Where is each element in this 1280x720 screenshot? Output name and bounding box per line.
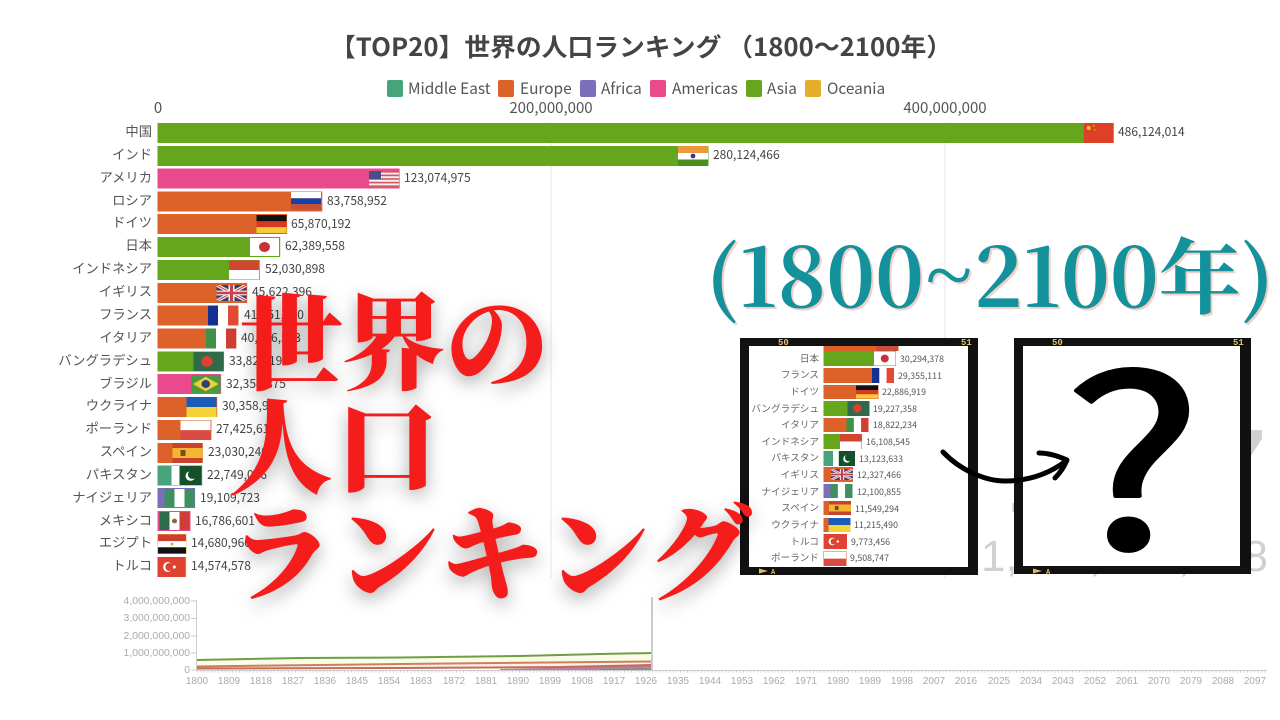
timeline line chart: 2007 (923, 676, 946, 687)
red headline: 世界の人口ランキング: 世界の (239, 261, 549, 411)
faint year counter behind frames: , (1178, 532, 1190, 581)
bar: ナイジェリア: 19,109,723 (200, 489, 260, 506)
legend: Europe (520, 77, 572, 99)
bar: インド (112, 144, 780, 166)
bar: イギリス (99, 281, 312, 303)
timeline line chart: 1935 (667, 676, 690, 687)
bar: バングラデシュ: 33,820,190 (229, 352, 289, 369)
timeline line chart: 1944 (699, 676, 722, 687)
small bar: トルコ: 9,773,456 (851, 535, 890, 548)
bar: ロシア: 83,758,952 (327, 192, 387, 209)
value axis: 400,000,000 (903, 97, 987, 118)
bar: パキスタン: 22,749,006 (207, 466, 267, 483)
small bar: 日本: 日本 (800, 351, 819, 365)
bar: 中国: 486,124,014 (1118, 123, 1185, 140)
timeline line chart: 2016 (955, 676, 978, 687)
timeline line chart: 1962 (763, 676, 786, 687)
teal heading: year range: (1800~2100年) (706, 214, 1274, 331)
small bar: バングラデシュ: 19,227,358 (873, 402, 917, 415)
panel: film frame with earlier ranking: A (771, 569, 776, 577)
timeline line chart: 1818 (250, 676, 273, 687)
panel: film frame with question mark (1014, 276, 1251, 616)
legend: Asia (767, 77, 797, 99)
bar: フランス: 41,151,400 (244, 306, 304, 323)
timeline line chart (124, 596, 1267, 687)
bar: イギリス: 45,622,396 (252, 283, 312, 300)
small bar: イギリス: 12,327,466 (857, 468, 901, 481)
small bar: パキスタン: パキスタン (771, 450, 819, 464)
small bar: フランス: 29,355,111 (898, 369, 942, 382)
bar: ウクライナ: ウクライナ (86, 395, 152, 414)
bar: メキシコ: メキシコ (99, 510, 152, 529)
bar: ロシア (112, 190, 387, 212)
bar: パキスタン: パキスタン (86, 464, 152, 483)
timeline line chart: 2097 (1244, 676, 1267, 687)
panel: film frame with question mark: 50 (1052, 338, 1063, 348)
small bar: ウクライナ (771, 517, 898, 532)
timeline line chart: 1926 (635, 676, 658, 687)
small bar: トルコ: トルコ (790, 534, 819, 548)
arrow: curved arrow to question mark (943, 452, 1067, 481)
small bar: ウクライナ: ウクライナ (771, 517, 819, 531)
panel: film frame with earlier ranking: 50 (778, 338, 789, 348)
bar: ポーランド: 27,425,610 (216, 420, 276, 437)
bar: アメリカ: 123,074,975 (404, 169, 471, 186)
icon: question mark: ? (1064, 276, 1202, 616)
small bar: ナイジェリア: 12,100,855 (857, 485, 901, 498)
timeline line chart: 1,000,000,000 (124, 648, 190, 659)
bar: ポーランド (86, 418, 276, 440)
small bar: インドネシア (761, 434, 910, 449)
panel: film frame with question mark: A (1046, 569, 1051, 577)
bar: バングラデシュ (58, 350, 289, 372)
small bar: イギリス: イギリス (781, 467, 819, 481)
bar: ブラジル (99, 373, 286, 394)
bar: トルコ: トルコ (112, 555, 152, 574)
bar: イタリア: イタリア (99, 327, 152, 346)
small bar: パキスタン: 13,123,633 (859, 452, 903, 465)
bar: ポーランド: ポーランド (86, 418, 152, 437)
panel: film frame with earlier ranking (740, 338, 978, 577)
bar: ナイジェリア (72, 487, 260, 508)
bar: ドイツ: ドイツ (112, 212, 152, 231)
timeline line chart: 2052 (1084, 676, 1107, 687)
panel: film frame with earlier ranking: 51 (961, 338, 972, 348)
timeline line chart: 1881 (475, 676, 498, 687)
legend: Americas (672, 77, 738, 99)
bar: ブラジル: ブラジル (99, 373, 152, 392)
bar: イタリア: 40,116,513 (241, 329, 301, 346)
small bar: イタリア: 18,822,234 (873, 418, 917, 431)
legend: Middle East (408, 77, 491, 99)
timeline line chart: 2,000,000,000 (124, 631, 190, 642)
timeline line chart: 1827 (282, 676, 305, 687)
bar: インド: 280,124,466 (713, 146, 780, 163)
bar: パキスタン (86, 464, 267, 486)
bar: インドネシア: 52,030,898 (265, 260, 325, 277)
timeline line chart: 1989 (859, 676, 882, 687)
timeline line chart: 1980 (827, 676, 850, 687)
bar chart: top 20 population ranking (58, 121, 1185, 577)
small bar: スペイン (781, 500, 899, 515)
timeline line chart: 1836 (314, 676, 337, 687)
timeline line chart: 4,000,000,000 (124, 596, 190, 607)
bar: ウクライナ: 30,358,960 (222, 397, 282, 414)
small bar: イタリア (781, 417, 917, 432)
small bar: スペイン: 11,549,294 (855, 502, 899, 515)
bar: 日本 (125, 235, 345, 257)
timeline line chart: 0 (184, 665, 190, 676)
small bar: ナイジェリア (761, 484, 901, 498)
red headline: 世界の人口ランキング: 人口 (229, 366, 439, 516)
bar: スペイン: スペイン (100, 441, 152, 460)
small bar: フランス (781, 367, 942, 383)
timeline line chart: 1953 (731, 676, 754, 687)
red headline: 世界の人口ランキング: ランキング (229, 472, 752, 622)
bar: 日本: 日本 (125, 235, 152, 254)
legend: Africa (601, 77, 642, 99)
timeline line chart: 3,000,000,000 (124, 613, 190, 624)
faint year counter behind frames (981, 405, 1268, 581)
red headline: 世界の人口ランキング (229, 261, 752, 622)
bar: スペイン: 23,030,240 (208, 443, 268, 460)
panel: film frame with question mark: 51 (1233, 338, 1244, 348)
small bar: フランス: フランス (781, 367, 819, 381)
bar: メキシコ (99, 510, 255, 531)
value axis: 0 (154, 97, 162, 118)
small bar: インドネシア: インドネシア (761, 434, 819, 448)
timeline line chart: 1908 (571, 676, 594, 687)
value axis: 200,000,000 (509, 97, 593, 118)
timeline line chart: 2088 (1212, 676, 1235, 687)
bar: イギリス: イギリス (99, 281, 152, 300)
bar: エジプト: 14,680,960 (191, 534, 251, 551)
timeline line chart: 1872 (443, 676, 466, 687)
bar: アメリカ (99, 167, 471, 188)
timeline line chart: 2079 (1180, 676, 1203, 687)
timeline line chart: 1971 (795, 676, 818, 687)
timeline line chart: 2061 (1116, 676, 1139, 687)
timeline line chart: 1899 (539, 676, 562, 687)
small bar: ドイツ (790, 384, 926, 399)
small bar: ポーランド (771, 550, 889, 566)
bar: フランス (99, 304, 304, 326)
chart title: 【TOP20】世界の人口ランキング （1800～2100年） (330, 28, 952, 64)
small bar: 日本 (800, 351, 944, 366)
bar: メキシコ: 16,786,601 (195, 512, 255, 529)
small bar: ウクライナ: 11,215,490 (854, 518, 898, 531)
bar: 日本: 62,389,558 (285, 237, 345, 254)
small bar: ポーランド: 9,508,747 (850, 551, 889, 564)
timeline line chart: 1998 (891, 676, 914, 687)
small bar: ドイツ: 22,886,919 (882, 385, 926, 398)
small bar: 日本: 30,294,378 (900, 352, 944, 365)
bar: ドイツ: 65,870,192 (291, 215, 351, 232)
timeline line chart: 2025 (988, 676, 1011, 687)
bar: アメリカ: アメリカ (99, 167, 152, 186)
timeline line chart: 1845 (346, 676, 369, 687)
timeline line chart: 1917 (603, 676, 626, 687)
bar: トルコ: 14,574,578 (191, 557, 251, 574)
bar: フランス: フランス (99, 304, 152, 323)
timeline line chart: 2034 (1020, 676, 1043, 687)
small bar: スペイン: スペイン (781, 500, 819, 514)
timeline line chart: 1890 (507, 676, 530, 687)
small bar: バングラデシュ (751, 401, 917, 416)
bar: ドイツ (112, 212, 351, 234)
bar: エジプト: エジプト (99, 532, 152, 551)
small bar: パキスタン (771, 450, 903, 466)
faint year counter behind frames: 1927 (1003, 405, 1268, 538)
bar: ナイジェリア: ナイジェリア (72, 487, 152, 506)
legend (387, 77, 885, 99)
small bar: インドネシア: 16,108,545 (866, 435, 910, 448)
small bar: イギリス (781, 467, 901, 482)
timeline line chart: 2070 (1148, 676, 1171, 687)
timeline line chart: 1809 (218, 676, 241, 687)
small bar: ナイジェリア: ナイジェリア (761, 484, 819, 498)
value axis (154, 97, 987, 578)
bar: ロシア: ロシア (112, 190, 152, 209)
bar: インドネシア: インドネシア (72, 258, 152, 277)
bar: ブラジル: 32,354,875 (226, 375, 286, 392)
faint year counter behind frames: 8 (1244, 532, 1268, 581)
timeline line chart: 1863 (410, 676, 433, 687)
small bar: トルコ (790, 534, 890, 549)
faint year counter behind frames: 1, (981, 532, 1018, 581)
bar: バングラデシュ: バングラデシュ (58, 350, 152, 369)
bar: トルコ (112, 555, 251, 577)
bar: イタリア (99, 327, 301, 348)
bar: 中国 (125, 121, 1185, 143)
timeline line chart: 2043 (1052, 676, 1075, 687)
bar: インド: インド (112, 144, 152, 163)
bar: スペイン (100, 441, 268, 463)
small bar: ポーランド: ポーランド (771, 550, 819, 564)
bar: インドネシア (72, 258, 325, 280)
timeline line chart: 1800 (186, 676, 209, 687)
small bar: ドイツ: ドイツ (790, 384, 819, 398)
timeline line chart: 1854 (378, 676, 401, 687)
bar: ウクライナ (86, 395, 282, 417)
small bar: イタリア: イタリア (781, 417, 819, 431)
bar: エジプト (99, 532, 251, 554)
faint year counter behind frames: , (1089, 532, 1101, 581)
bar: 中国: 中国 (125, 121, 152, 140)
legend: Oceania (827, 77, 885, 99)
small bar: バングラデシュ: バングラデシュ (751, 401, 819, 415)
